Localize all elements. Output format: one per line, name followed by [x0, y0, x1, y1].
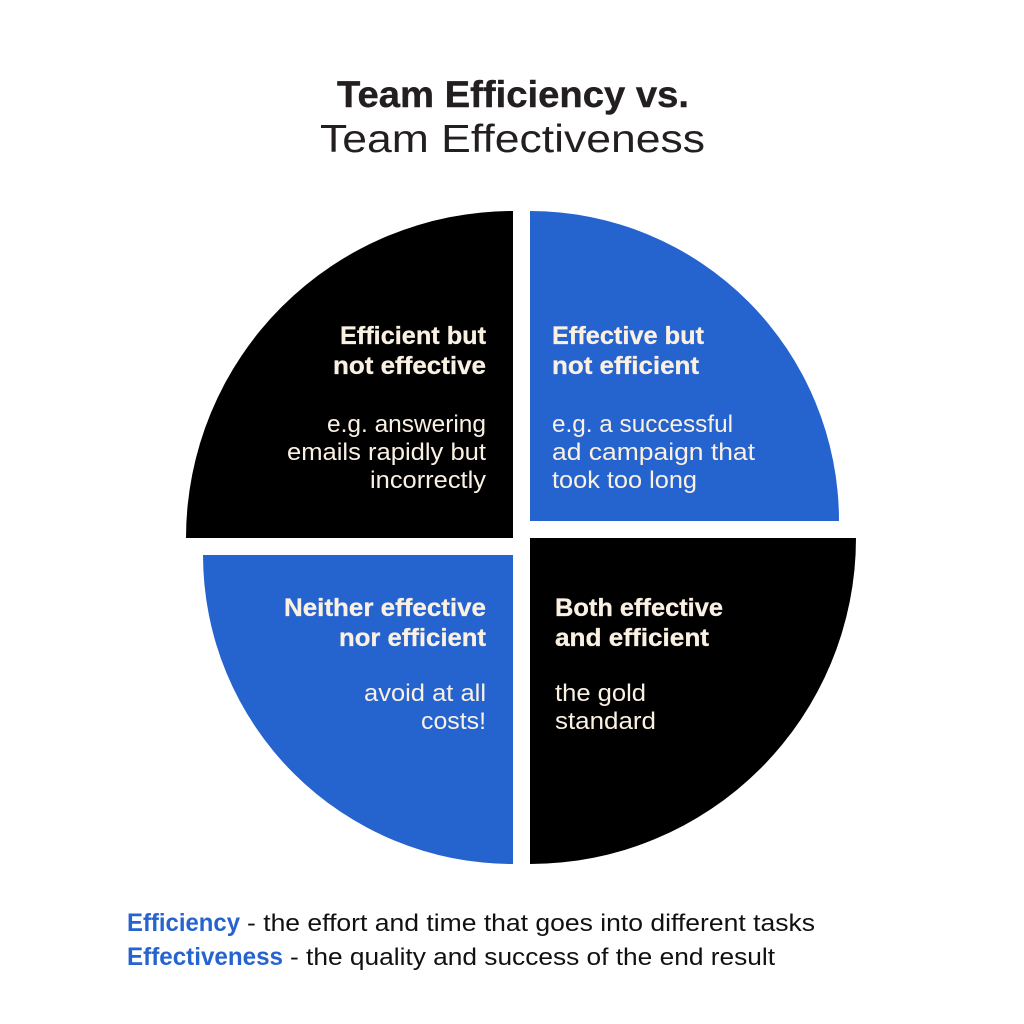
panel: effective but not efficient: Effective but — [552, 322, 705, 350]
title — [320, 74, 705, 161]
panel: efficient but not effective — [186, 211, 513, 538]
definition: efficiency: Efficiency — [127, 909, 240, 937]
panel: neither effective nor efficient: nor efficient — [339, 624, 487, 652]
title: Team Efficiency vs. — [337, 74, 689, 115]
panel: efficient but not effective: emails rapidly but — [287, 439, 486, 466]
definition: effectiveness: - the quality and success of the end result — [290, 944, 775, 971]
panel: efficient but not effective: not effective — [333, 352, 486, 380]
panel: both effective and efficient — [530, 538, 856, 864]
panel: efficient but not effective: incorrectly — [370, 467, 486, 494]
title: Team Effectiveness — [320, 118, 705, 161]
panel: effective but not efficient — [530, 211, 839, 521]
panel: both effective and efficient: Both effective — [555, 594, 723, 622]
panel: effective but not efficient: ad campaign that — [552, 439, 755, 466]
panel: effective but not efficient: not efficient — [552, 352, 700, 380]
panel: effective but not efficient: e.g. a successful — [552, 411, 733, 438]
panel: effective but not efficient: took too long — [552, 467, 697, 494]
panel: neither effective nor efficient: Neither effective — [284, 594, 486, 622]
panel: neither effective nor efficient: avoid at all — [364, 680, 486, 707]
panel: efficient but not effective: e.g. answering — [327, 411, 486, 438]
definition: effectiveness: Effectiveness — [127, 943, 283, 971]
panel: neither effective nor efficient — [203, 555, 513, 864]
panel: efficient but not effective: Efficient but — [340, 322, 487, 350]
definition: efficiency: - the effort and time that goes into different tasks — [247, 910, 815, 937]
panel: neither effective nor efficient: costs! — [421, 708, 486, 735]
panel: both effective and efficient: and efficient — [555, 624, 710, 652]
definition: effectiveness — [127, 943, 775, 971]
panel: both effective and efficient: standard — [555, 708, 656, 735]
panel: both effective and efficient: the gold — [555, 680, 646, 707]
